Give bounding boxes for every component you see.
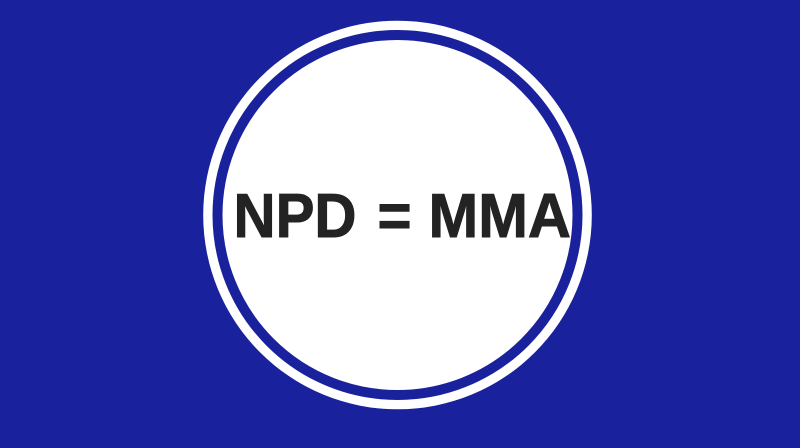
title text: = bbox=[378, 181, 412, 251]
title text: MMA bbox=[428, 181, 571, 251]
outer white circle bbox=[203, 21, 592, 409]
circle badge bbox=[203, 21, 592, 409]
title text: NPD bbox=[234, 181, 356, 251]
blue ring bbox=[218, 35, 578, 395]
